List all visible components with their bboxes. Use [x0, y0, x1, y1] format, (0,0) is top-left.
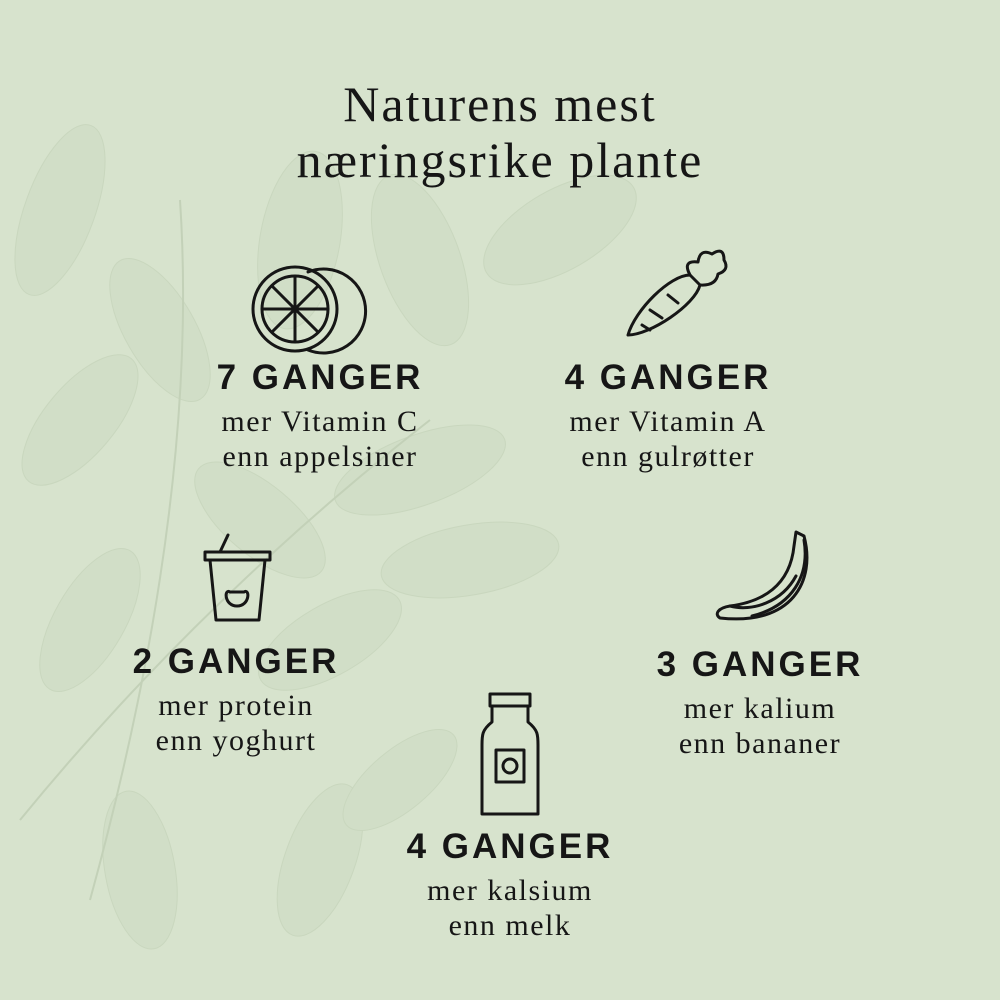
icon: banana [716, 530, 808, 620]
item: kalium: mer kalium [684, 692, 836, 725]
icon: milk bottle [480, 692, 540, 816]
item: vitamin C: mer Vitamin C [221, 405, 419, 438]
item: kalsium: enn melk [449, 909, 571, 942]
icon: orange [252, 266, 368, 354]
item: vitamin A: enn gulrøtter [581, 440, 755, 473]
item: kalsium [407, 827, 613, 942]
item: protein: 2 GANGER [133, 642, 339, 681]
title: næringsrike plante [297, 132, 703, 188]
item: vitamin C: 7 GANGER [217, 358, 423, 397]
item: kalsium: mer kalsium [427, 874, 593, 907]
icon: yogurt [204, 534, 272, 622]
title: Naturens mest [343, 76, 657, 132]
item: kalsium: 4 GANGER [407, 827, 613, 866]
item: protein [133, 642, 339, 757]
item: vitamin C: enn appelsiner [222, 440, 418, 473]
item: kalium: enn bananer [679, 727, 841, 760]
item: vitamin A: 4 GANGER [565, 358, 771, 397]
item: protein: mer protein [158, 689, 314, 722]
item: kalium [657, 645, 863, 760]
title [297, 76, 703, 188]
item: vitamin C [217, 358, 423, 473]
item: kalium: 3 GANGER [657, 645, 863, 684]
item: protein: enn yoghurt [156, 724, 316, 757]
item: vitamin A [565, 358, 771, 473]
icon: carrot [626, 250, 728, 336]
item: vitamin A: mer Vitamin A [569, 405, 767, 438]
